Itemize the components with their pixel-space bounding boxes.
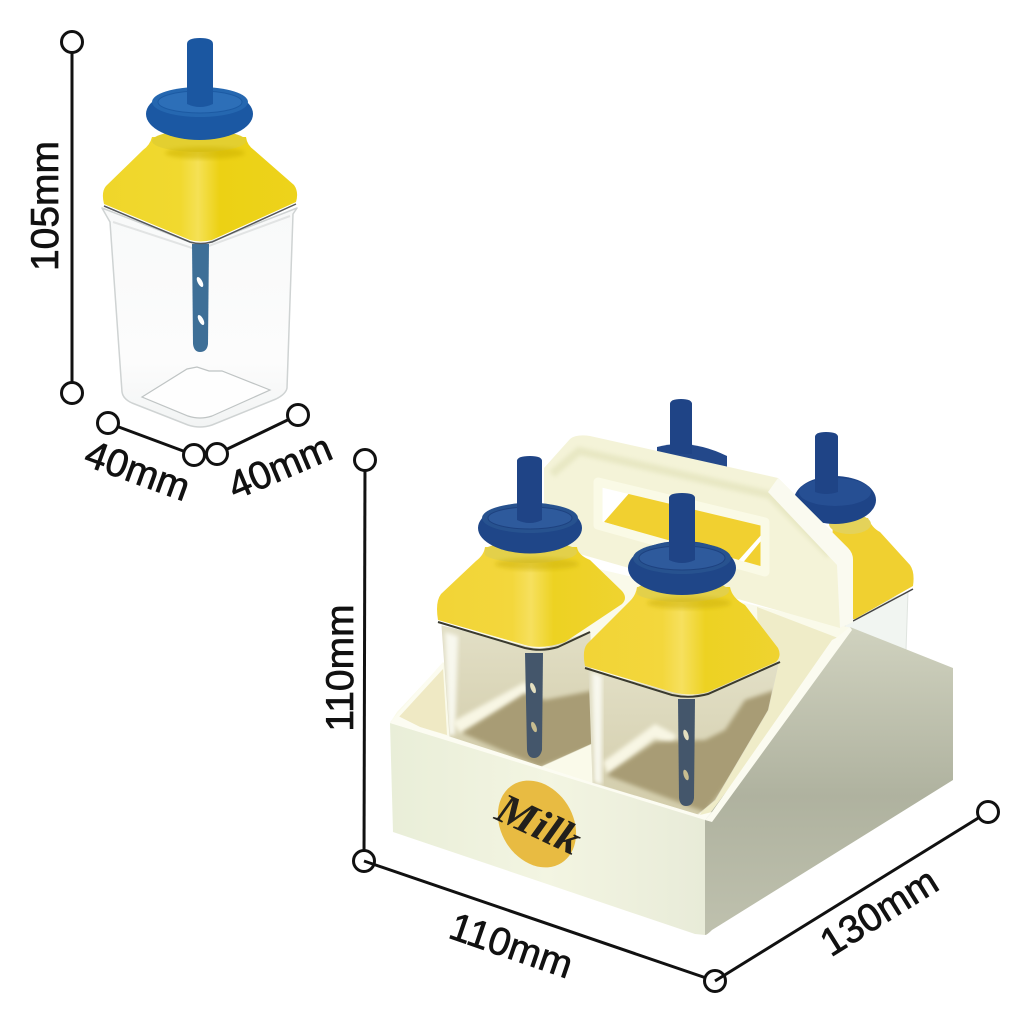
front bottle paddle bbox=[678, 699, 695, 806]
carrier handle bbox=[544, 435, 853, 628]
right bottle neck bbox=[829, 514, 871, 534]
crate width dimension bbox=[364, 861, 726, 992]
lid base line bbox=[104, 204, 296, 244]
front bottle yellow lid bbox=[584, 587, 780, 694]
front bottle bbox=[584, 493, 780, 815]
back bottle yellow lid bbox=[604, 490, 770, 562]
crate right inner wall bbox=[700, 607, 838, 815]
single bottle right width dimension bbox=[206, 404, 338, 508]
label: 105mm: 105mm bbox=[24, 141, 67, 271]
bottle glass base bbox=[142, 367, 270, 418]
dipper paddle bbox=[192, 244, 209, 352]
milk label: Milk bbox=[488, 784, 589, 865]
blue cap bbox=[146, 88, 253, 140]
crate right wall top edge bbox=[705, 627, 852, 822]
front bottle neck bbox=[637, 586, 729, 602]
right bottle yellow lid bbox=[830, 518, 914, 620]
left bottle yellow lid bbox=[437, 547, 625, 647]
single bottle bbox=[102, 38, 297, 427]
left bottle neck bbox=[485, 546, 577, 563]
front bottle cap bbox=[628, 541, 736, 595]
back bottle stick and cap bbox=[657, 399, 727, 470]
lid neck shadow bbox=[152, 134, 246, 152]
bottle inner rim line bbox=[113, 216, 290, 250]
front bottle stick bbox=[669, 493, 695, 563]
crate right side wall bbox=[705, 627, 953, 935]
single bottle left width dimension bbox=[79, 412, 204, 510]
left bottle lid base line bbox=[438, 622, 590, 650]
label: 130mm: 130mm bbox=[813, 860, 946, 965]
right bottle glass bbox=[845, 592, 908, 650]
front bottle glass bbox=[589, 664, 778, 815]
front bottle contents bbox=[592, 672, 775, 812]
single bottle height dimension bbox=[24, 32, 82, 404]
label: 110mm height: 110mm bbox=[319, 604, 362, 732]
handle inner shading bbox=[552, 451, 830, 555]
crate front rim bbox=[390, 716, 712, 820]
right bottle yellow seen through handle bbox=[741, 530, 770, 575]
left bottle contents bbox=[445, 632, 596, 767]
left bottle glass bbox=[442, 626, 593, 767]
left bottle stick bbox=[517, 456, 542, 523]
milk badge bbox=[482, 766, 592, 882]
label: 40mm left: 40mm bbox=[79, 433, 196, 510]
right bottle stick bbox=[815, 432, 838, 494]
handle edge highlight bbox=[768, 478, 853, 628]
front bottle lid base line bbox=[585, 662, 780, 697]
blue stick bbox=[187, 38, 213, 107]
crate height dimension bbox=[319, 450, 376, 872]
right bottle cap bbox=[794, 476, 876, 524]
left bottle cap bbox=[478, 502, 582, 554]
crate left inner wall bbox=[398, 668, 447, 735]
left bottle paddle bbox=[525, 653, 543, 758]
crate inner back and floor bbox=[390, 560, 852, 820]
crate depth dimension bbox=[715, 802, 998, 981]
label: 40mm right: 40mm bbox=[222, 427, 338, 508]
right bottle bbox=[794, 432, 914, 650]
crate left rim bbox=[390, 662, 443, 722]
label: 110mm width: 110mm bbox=[444, 905, 578, 987]
bottle glass body bbox=[102, 208, 297, 427]
right bottle lid base line bbox=[853, 589, 913, 621]
left bottle bbox=[437, 456, 625, 767]
handle window ridge bbox=[598, 482, 765, 572]
crate front wall bbox=[390, 716, 712, 935]
yellow lid bbox=[103, 137, 297, 242]
